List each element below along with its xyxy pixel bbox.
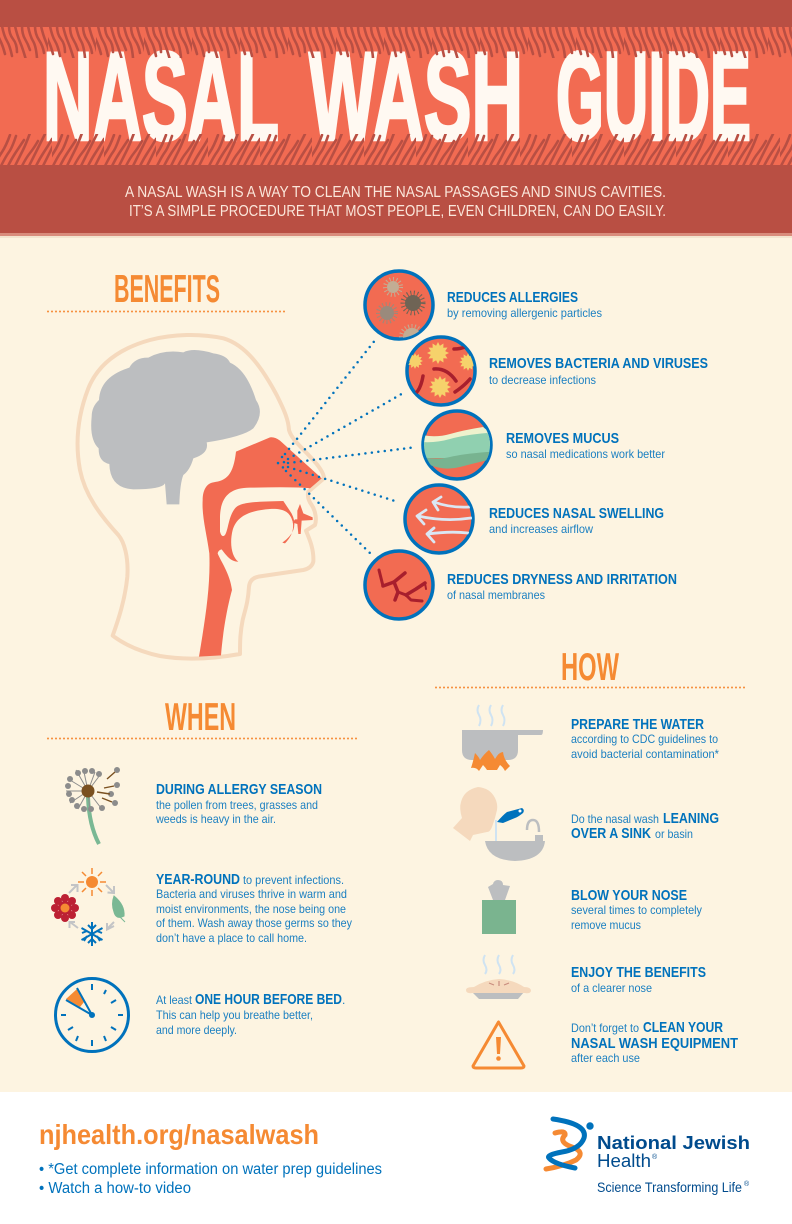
text: clean equipment: Don’t forget to xyxy=(571,1021,639,1035)
text: blow your nose xyxy=(571,887,702,932)
text: year-round: of them. Wash away those germs so they xyxy=(156,916,352,930)
snowflake xyxy=(82,922,102,946)
logo: National Jewish Health: National Jewish xyxy=(597,1133,750,1153)
benefit text: bacteria xyxy=(489,355,708,387)
logo: National Jewish Health: Science Transforming Life xyxy=(597,1179,742,1195)
nasal airway and throat xyxy=(199,437,322,657)
leaf xyxy=(112,896,125,922)
text: year-round: moist environments, the nose being one xyxy=(156,902,346,916)
logo: National Jewish Health xyxy=(546,1119,750,1195)
text: during allergy season xyxy=(155,781,322,826)
benefit circle: bacteria xyxy=(407,337,477,405)
benefit text: dryness: REDUCES DRYNESS AND IRRITATION xyxy=(447,571,677,588)
turbinates xyxy=(293,504,313,534)
benefit text: mucus xyxy=(506,430,665,461)
text: during allergy season: the pollen from trees, grasses and xyxy=(156,798,318,812)
text: lean over sink: LEANING xyxy=(663,810,719,827)
benefit text: swelling xyxy=(489,505,664,536)
benefit text: bacteria: REMOVES BACTERIA AND VIRUSES xyxy=(489,355,708,372)
intro text: A NASAL WASH IS A WAY TO CLEAN THE NASAL PASSAGES AND SINUS CAVITIES. xyxy=(125,184,666,201)
icon: leaning over sink xyxy=(453,787,545,861)
benefit circle: allergies xyxy=(365,271,433,348)
logo: National Jewish Health: ® xyxy=(652,1153,658,1161)
text: lean over sink: or basin xyxy=(655,827,693,841)
icon: pie xyxy=(466,955,531,999)
text: clean equipment: NASAL WASH EQUIPMENT xyxy=(571,1035,738,1052)
benefit text: mucus: REMOVES MUCUS xyxy=(506,430,619,447)
icon: dandelion xyxy=(65,767,120,844)
heading: when: WHEN xyxy=(165,696,236,739)
icon: pot on flame xyxy=(462,705,543,771)
text: before bed: This can help you breathe better, xyxy=(156,1008,313,1022)
text: enjoy the benefits xyxy=(571,964,706,995)
text: prepare the water xyxy=(571,716,719,761)
sun xyxy=(78,868,106,896)
heading: benefits: BENEFITS xyxy=(114,268,220,311)
text: enjoy the benefits: ENJOY THE BENEFITS xyxy=(571,964,706,981)
intro text: IT’S A SIMPLE PROCEDURE THAT MOST PEOPLE, EVEN CHILDREN, CAN DO EASILY. xyxy=(129,203,666,220)
title: WASH xyxy=(309,28,523,166)
benefit circle: swelling xyxy=(405,485,473,553)
head diagram xyxy=(77,335,324,659)
text: blow your nose: BLOW YOUR NOSE xyxy=(571,887,687,904)
text: before bed: At least xyxy=(156,993,193,1007)
title: NASAL xyxy=(43,28,279,166)
benefit text: allergies: REDUCES ALLERGIES xyxy=(447,289,578,306)
text: before bed xyxy=(156,991,345,1037)
head outline xyxy=(77,335,324,659)
benefit text: dryness: of nasal membranes xyxy=(447,588,545,602)
benefit text: bacteria: to decrease infections xyxy=(489,373,596,387)
text: clean equipment xyxy=(571,1019,738,1065)
text: prepare the water: according to CDC guidelines to xyxy=(571,732,718,746)
icon: tissue box xyxy=(482,880,516,934)
text: year-round: YEAR-ROUND xyxy=(156,871,240,888)
icon: warning triangle xyxy=(473,1022,524,1068)
benefit text: allergies: by removing allergenic particles xyxy=(447,306,602,320)
text: blow your nose: several times to completely xyxy=(571,903,702,917)
text: lean over sink: Do the nasal wash xyxy=(571,812,659,826)
text: lean over sink xyxy=(571,810,719,842)
brain xyxy=(91,350,260,504)
text: during allergy season: DURING ALLERGY SEASON xyxy=(156,781,322,798)
benefit circle: mucus xyxy=(422,411,492,479)
text: blow your nose: remove mucus xyxy=(571,918,641,932)
text: year-round: to prevent infections. xyxy=(243,873,344,887)
text: before bed: ONE HOUR BEFORE BED xyxy=(195,991,342,1008)
text: clean equipment: after each use xyxy=(571,1051,640,1065)
cycle arrows xyxy=(69,885,114,930)
footer bullets: • Watch a how-to video xyxy=(39,1180,191,1197)
text: year-round: Bacteria and viruses thrive in warm and xyxy=(156,887,347,901)
footer panel xyxy=(0,1092,792,1224)
text: clean equipment: CLEAN YOUR xyxy=(643,1019,723,1036)
benefit text: swelling: and increases airflow xyxy=(489,522,593,536)
title xyxy=(43,28,751,166)
text: year-round: don’t have a place to call home. xyxy=(156,931,307,945)
text: year-round xyxy=(156,871,352,945)
text: enjoy the benefits: of a clearer nose xyxy=(571,981,652,995)
text: prepare the water: PREPARE THE WATER xyxy=(571,716,704,733)
text: lean over sink: OVER A SINK xyxy=(571,825,651,842)
icon: seasons cycle xyxy=(51,868,125,946)
icon: clock xyxy=(56,978,128,1052)
benefit circle: dryness xyxy=(365,551,433,619)
logo: National Jewish Health: Health xyxy=(597,1151,651,1171)
logo: National Jewish Health: ® xyxy=(744,1180,750,1188)
benefit text: dryness xyxy=(447,571,677,602)
footer bullets: • *Get complete information on water prep guidelines xyxy=(39,1161,382,1178)
footer bullets xyxy=(39,1161,382,1197)
text: prepare the water: avoid bacterial contamination* xyxy=(571,747,719,761)
text: before bed: and more deeply. xyxy=(156,1023,237,1037)
dotted rays from nose to benefits xyxy=(278,339,417,556)
heading: how: HOW xyxy=(561,646,619,689)
text: before bed: . xyxy=(342,993,345,1007)
text: during allergy season: weeds is heavy in the air. xyxy=(155,812,276,826)
benefit text: allergies xyxy=(447,289,602,320)
benefit text: swelling: REDUCES NASAL SWELLING xyxy=(489,505,664,522)
flower xyxy=(51,894,79,922)
benefit text: mucus: so nasal medications work better xyxy=(506,447,665,461)
header banner xyxy=(0,0,792,238)
footer url: njhealth.org/nasalwash xyxy=(39,1119,319,1150)
intro text xyxy=(125,184,666,220)
